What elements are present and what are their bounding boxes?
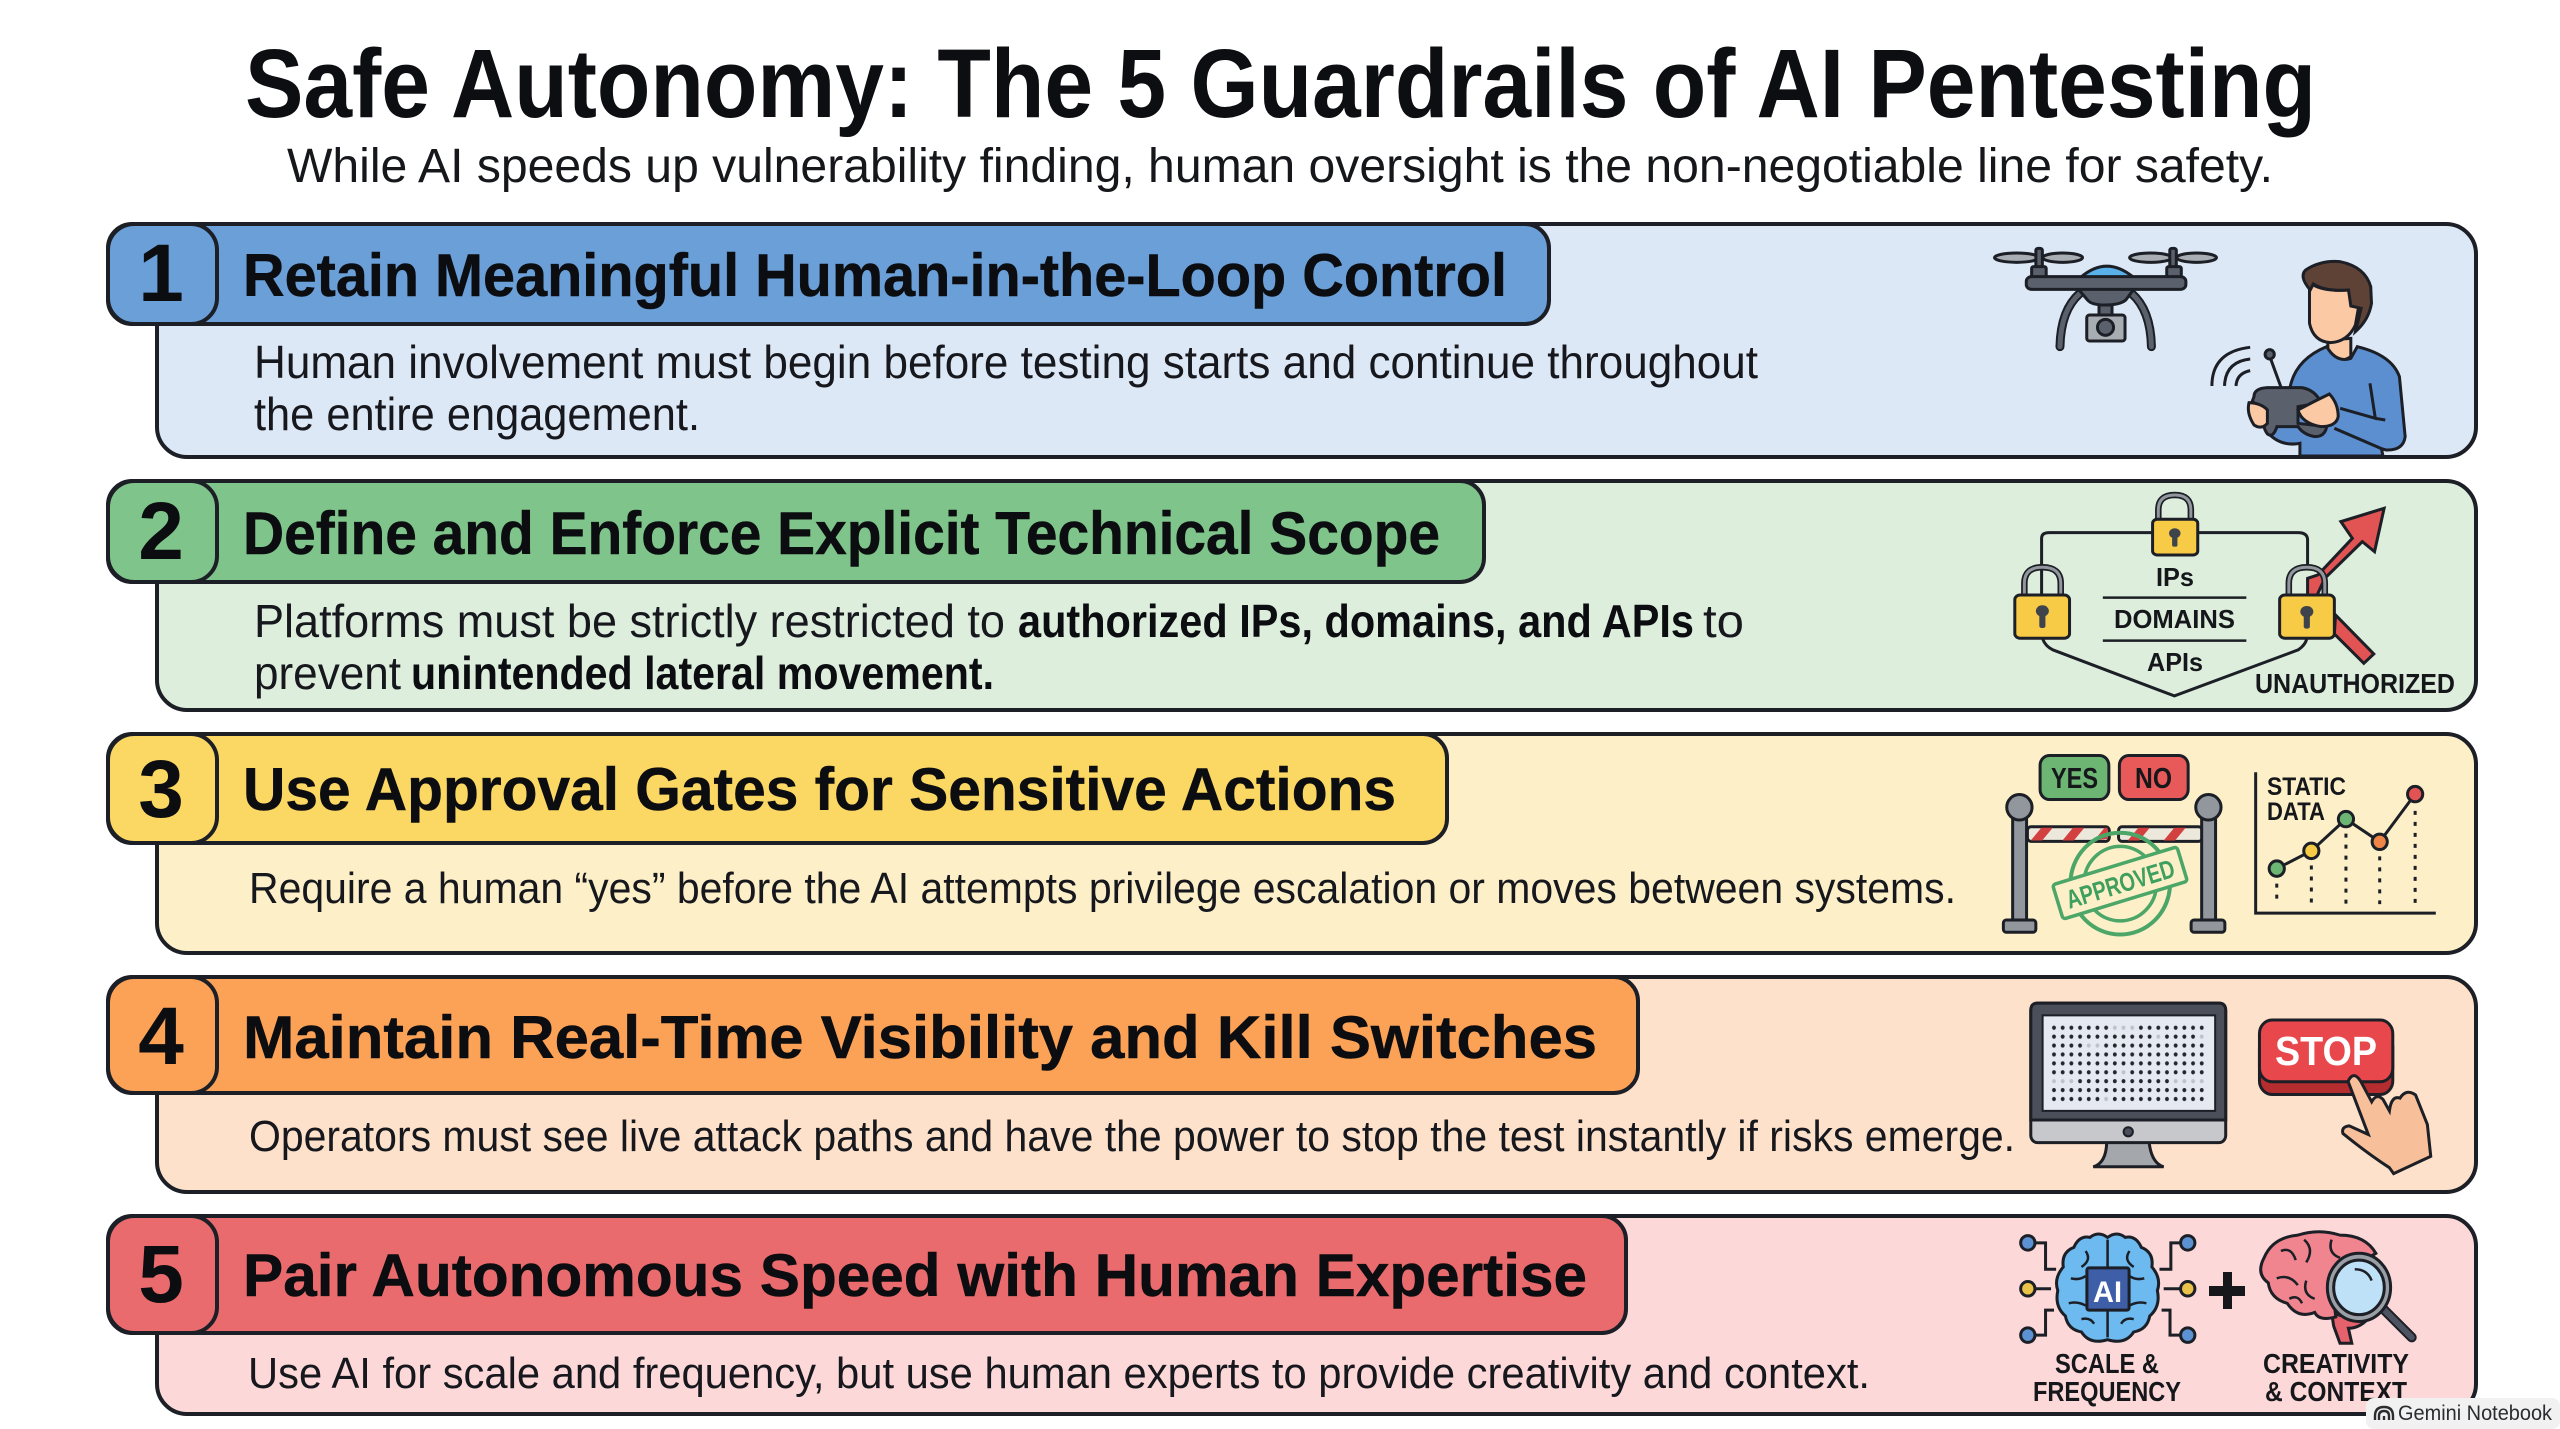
- panel 2 text: prevent: [254, 647, 401, 699]
- icon: AI brain with circuits: AI: [2093, 1276, 2122, 1309]
- icon: monitor with live data: [2031, 1003, 2226, 1167]
- icon: static data chart: STATIC: [2267, 773, 2346, 801]
- panel 1 header bar: [108, 224, 1549, 324]
- label: creativity and context: & CONTEXT: [2265, 1376, 2407, 1407]
- icon: approval barrier: NO: [2135, 763, 2172, 795]
- watermark: Gemini Notebook: Gemini Notebook: [2398, 1402, 2552, 1425]
- panel 5 heading: Pair Autonomous Speed with Human Expertise: [243, 1242, 1587, 1309]
- icon: drone: [1995, 248, 2216, 347]
- panel 5 text: Use AI for scale and frequency, but use human experts to provide creativity and context.: [248, 1349, 1870, 1398]
- label: creativity and context: [2263, 1348, 2409, 1407]
- panel 4 text: Operators must see live attack paths and have the power to stop the test instantly if risks emerge.: [249, 1112, 2015, 1161]
- panel 4 heading: Maintain Real-Time Visibility and Kill Switches: [243, 1004, 1597, 1071]
- panel 1 text: the entire engagement.: [254, 388, 700, 440]
- panel 4 number badge: 4: [138, 991, 184, 1082]
- icon: locked scope perimeter: [2015, 495, 2455, 699]
- panel 4 number badge: [108, 977, 217, 1093]
- panel 1 number badge: 1: [138, 228, 184, 319]
- panel 5 header bar: [108, 1216, 1626, 1333]
- panel 2 text: [254, 595, 1744, 699]
- panel 2 number badge: [108, 481, 217, 582]
- icon: locked scope perimeter: DOMAINS: [2114, 604, 2235, 634]
- title: Safe Autonomy: The 5 Guardrails of AI Pentesting: [245, 29, 2316, 138]
- icon: stop button with hand: [2259, 1020, 2431, 1174]
- approved stamp: APPROVED: [2062, 853, 2178, 915]
- icon: locked scope perimeter: APIs: [2147, 647, 2203, 677]
- watermark: Gemini Notebook: [2366, 1398, 2560, 1429]
- panel 2 text: authorized IPs, domains, and APIs: [1018, 595, 1694, 647]
- panel 4: visibility and kill switches: [108, 977, 2476, 1192]
- panel 2 text: to: [1703, 595, 1744, 647]
- panel 5: autonomous speed plus human expertise: [108, 1216, 2476, 1414]
- label: creativity and context: CREATIVITY: [2263, 1348, 2409, 1379]
- icon: plus sign: [2209, 1272, 2245, 1309]
- icon: approval barrier: YES: [2051, 763, 2098, 795]
- panel 1 body: [157, 224, 2476, 457]
- label: scale and frequency: [2033, 1348, 2181, 1407]
- panel 2 body: [157, 481, 2476, 710]
- icon: static data chart: [2256, 772, 2436, 913]
- panel 3 number badge: [108, 734, 217, 843]
- panel 1 number badge: [108, 224, 217, 324]
- panel 3 heading: Use Approval Gates for Sensitive Actions: [243, 756, 1396, 823]
- panel 1 text: [254, 336, 1758, 440]
- panel 2: technical scope: [108, 481, 2476, 710]
- subtitle: While AI speeds up vulnerability finding, human oversight is the non-negotiable line for safety.: [287, 140, 2273, 193]
- panel 1 text: Human involvement must begin before testing starts and continue throughout: [254, 336, 1758, 388]
- panel 1 heading: Retain Meaningful Human-in-the-Loop Control: [243, 242, 1507, 309]
- panel 3 text: Require a human “yes” before the AI attempts privilege escalation or moves between systems.: [249, 864, 1956, 913]
- icon: locked scope perimeter: UNAUTHORIZED: [2255, 668, 2455, 699]
- panel 3: approval gates: [108, 734, 2476, 953]
- panel 2 text: Platforms must be strictly restricted to: [254, 595, 1005, 647]
- icon: approval barrier: [2003, 755, 2225, 935]
- panel 4 body: [157, 977, 2476, 1192]
- icon: stop button with hand: STOP: [2275, 1028, 2377, 1074]
- panel 2 text: unintended lateral movement.: [411, 647, 994, 699]
- icon: static data chart: DATA: [2267, 798, 2325, 826]
- label: scale and frequency: SCALE &: [2055, 1348, 2159, 1379]
- icon: AI brain with circuits: [2021, 1234, 2195, 1342]
- panel 2 header bar: [108, 481, 1484, 582]
- label: scale and frequency: FREQUENCY: [2033, 1376, 2181, 1407]
- panel 3 header bar: [108, 734, 1447, 843]
- panel 5 number badge: 5: [138, 1229, 184, 1320]
- panel 2 heading: Define and Enforce Explicit Technical Scope: [243, 500, 1440, 567]
- panel 3 number badge: 3: [138, 744, 184, 835]
- panel 5 number badge: [108, 1216, 217, 1333]
- panel 3 body: [157, 734, 2476, 953]
- panel 5 body: [157, 1216, 2476, 1414]
- icon: human brain with magnifier: [2261, 1232, 2412, 1343]
- panel 2 number badge: 2: [138, 486, 184, 577]
- icon: operator with remote: [2212, 261, 2405, 456]
- panel 4 header bar: [108, 977, 1638, 1093]
- panel 1: human in the loop: [108, 224, 2476, 457]
- icon: locked scope perimeter: IPs: [2156, 562, 2194, 592]
